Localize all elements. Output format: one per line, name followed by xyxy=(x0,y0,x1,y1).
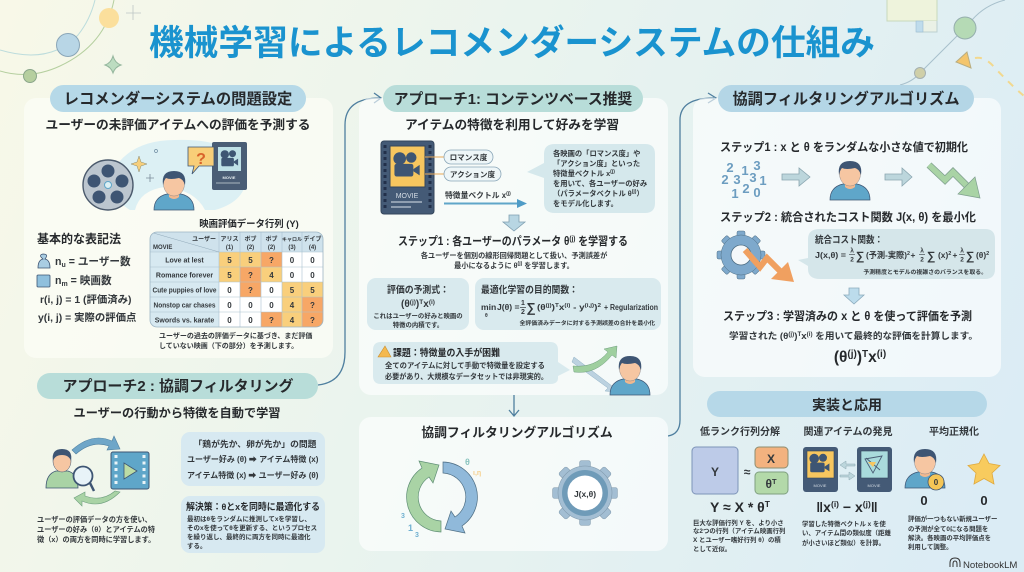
column: low rank factorization: θ xyxy=(765,477,772,491)
table: movie ratings: 4 xyxy=(290,316,295,325)
table: movie ratings: 0 xyxy=(227,286,232,295)
column: related items: い、アイテム間の類似度（距離 xyxy=(802,528,891,537)
formula: cost: 2 xyxy=(907,251,910,257)
title: 機械学習によるレコメンダーシステムの仕組み xyxy=(149,23,875,63)
notation list: n xyxy=(55,275,61,287)
icon: random numbers: 3 xyxy=(753,158,761,173)
icon: random numbers: 2 xyxy=(721,172,729,187)
step 3 description: T xyxy=(797,332,802,338)
icon: cycle arrows: θ xyxy=(465,457,470,467)
step 3 description: (j) xyxy=(788,332,794,338)
callout: feature explanation: (j) xyxy=(610,169,615,175)
notation list: r(i, j) = 1 (評価済み) xyxy=(40,293,132,306)
subheading: predict ratings: ユーザーの未評価アイテムへの評価を予測する xyxy=(46,117,310,132)
final formula: (i) xyxy=(877,349,886,360)
panel: algorithm steps xyxy=(693,85,1001,377)
formula: objective: - y xyxy=(570,302,585,312)
box: prediction formula: これはユーザーの好みと映画の xyxy=(373,311,463,320)
box: objective function xyxy=(475,278,661,330)
formula: cost: ∑ xyxy=(856,249,864,263)
formula: cost: + xyxy=(953,250,958,260)
icon: random numbers: 2 xyxy=(742,181,750,196)
column: mean normalization: 0 xyxy=(934,478,939,487)
caption: approach 2: ユーザーの好み（θ）とアイテムの特 xyxy=(37,525,155,534)
icon: cycle arrows: 3 xyxy=(401,513,405,520)
table caption xyxy=(159,331,312,350)
feature chips: ロマンス度 xyxy=(450,152,488,162)
icon: movie poster xyxy=(381,141,434,214)
caption: approach 2 xyxy=(37,515,155,544)
arrow: user to chart xyxy=(885,168,912,186)
callout: feature explanation: （パラメータベクトル θ xyxy=(553,189,632,198)
step 1 description xyxy=(421,251,608,270)
formula: objective: x xyxy=(559,302,565,312)
heading pill: problem setting xyxy=(50,85,306,112)
table: movie ratings: ? xyxy=(310,301,315,310)
formula: objective: 1 xyxy=(521,300,525,307)
panel: approach 1 xyxy=(359,85,668,395)
table: movie ratings: ? xyxy=(310,316,315,325)
icon: random numbers: 0 xyxy=(753,185,761,200)
formula: objective: (i,j) xyxy=(585,303,594,309)
heading pill: approach 1: アプローチ1: コンテンツベース推奨 xyxy=(394,90,632,108)
final formula: x xyxy=(868,349,877,366)
formula: objective xyxy=(481,300,658,319)
icon: gear with descending arrow xyxy=(717,231,794,282)
icon: cost gear: J(x,θ) xyxy=(574,489,596,499)
formula: cost: 2 xyxy=(948,251,951,257)
table: movie ratings: 4 xyxy=(269,271,274,280)
callout: feature explanation: ） xyxy=(636,189,644,198)
icon: warning xyxy=(378,346,391,357)
formula: objective: 2 xyxy=(521,309,525,316)
formula: objective: + Regularization xyxy=(604,302,658,312)
icon: cost gear xyxy=(553,461,617,525)
box: prediction formula: (i) xyxy=(429,299,435,306)
column: related items: − x xyxy=(839,499,863,515)
table: movie ratings: 5 xyxy=(248,256,253,265)
step 1 description: を学習します。 xyxy=(522,261,574,270)
table: movie ratings: 0 xyxy=(310,271,315,280)
formula: objective: 2 xyxy=(597,303,601,309)
formula: objective: T xyxy=(555,303,560,309)
formula: cost: (θ) xyxy=(976,250,986,260)
illustration: user and film loop xyxy=(46,436,149,506)
callout: cost function: 予測精度とモデルの複雑さのバランスを取る。 xyxy=(863,268,987,276)
illustration: reel, user and movie xyxy=(83,140,247,210)
callout: cost function: 統合コスト関数： xyxy=(815,234,883,245)
table: movie ratings: (4) xyxy=(309,245,316,251)
box: prediction formula: T xyxy=(419,299,423,306)
notation list: 基本的な表記法 xyxy=(37,231,121,246)
table: movie ratings: 5 xyxy=(227,256,232,265)
notation list: m xyxy=(61,281,68,288)
final formula: ) xyxy=(857,349,862,366)
table: movie ratings: Romance forever xyxy=(156,272,213,280)
arrow: down to step 3 xyxy=(844,288,864,304)
icon: cycle arrows xyxy=(401,457,481,539)
illustration: reel, user and movie: ? xyxy=(196,151,206,168)
notation list: = 映画数 xyxy=(68,274,112,287)
feature vector arrow: 特徴量ベクトル x xyxy=(445,191,506,200)
table: movie ratings: 0 xyxy=(269,301,274,310)
box: prediction formula: (j) xyxy=(410,299,416,306)
formula: cost: λ xyxy=(850,246,854,254)
box: chicken and egg: ユーザー好み (θ) ➡ アイテム特徴 (x) xyxy=(187,454,319,464)
box: solution: する。 xyxy=(187,542,206,550)
logo: NotebookLM xyxy=(950,558,1017,571)
box: prediction formula: 特徴の内積です。 xyxy=(393,320,443,329)
subheading: use item features: アイテムの特徴を利用して好みを学習 xyxy=(405,117,619,132)
formula: cost: 2 xyxy=(920,256,924,264)
icon: random numbers: 2 xyxy=(726,160,734,175)
heading pill: problem setting: レコメンダーシステムの問題設定 xyxy=(64,90,292,108)
column: mean normalization: 平均正規化 xyxy=(929,425,979,438)
formula: objective: ∑ xyxy=(526,300,536,315)
column: mean normalization: の予測が全て0になる問題を xyxy=(908,524,988,533)
panel: problem setting xyxy=(24,85,333,358)
callout: cost function xyxy=(798,229,995,279)
table: movie ratings: MOVIE xyxy=(153,245,172,251)
notation list: n xyxy=(55,256,61,268)
icon: random numbers: 1 xyxy=(731,186,739,201)
table: movie ratings: Cute puppies of love xyxy=(152,288,217,294)
formula: objective: (θ xyxy=(537,302,545,312)
column: related items: ‖ xyxy=(871,499,878,515)
box: prediction formula xyxy=(367,278,469,330)
table: movie ratings: 5 xyxy=(227,271,232,280)
box: objective function: 最適化学習の目的関数： xyxy=(481,283,578,296)
icon: user xyxy=(830,161,870,200)
logo: NotebookLM: NotebookLM xyxy=(963,560,1017,571)
column: related items: 関連アイテムの発見 xyxy=(804,425,892,438)
illustration: crossing arrows and user xyxy=(572,346,650,395)
heading pill: approach 1 xyxy=(383,85,643,112)
table: movie ratings: キャロル xyxy=(282,237,302,243)
table: movie ratings: Swords vs. karate xyxy=(155,318,214,324)
formula: cost: ∑ xyxy=(966,249,974,263)
formula: cost xyxy=(815,246,989,264)
final formula: (θ xyxy=(834,349,847,366)
callout: challenge xyxy=(373,342,570,384)
box: chicken and egg: アイテム特徴 (x) ➡ ユーザー好み (θ) xyxy=(187,470,319,480)
column: related items: MOVIE xyxy=(814,483,827,488)
feature vector arrow xyxy=(444,190,527,208)
table: movie ratings: 0 xyxy=(290,256,295,265)
heading pill: implementation xyxy=(707,391,987,417)
heading pill: algorithm: 協調フィルタリングアルゴリズム xyxy=(732,90,960,108)
step 3 description: (i) xyxy=(807,332,813,338)
icon: random numbers: 1 xyxy=(759,173,767,188)
table: movie ratings: 0 xyxy=(248,316,253,325)
table: movie ratings: 5 xyxy=(310,286,315,295)
column: mean normalization: 0 xyxy=(920,493,928,508)
feature chips: アクション度 xyxy=(450,169,495,179)
icon: random numbers: 1 xyxy=(741,163,749,178)
column: low rank factorization: Y xyxy=(711,465,719,479)
table: movie ratings: (3) xyxy=(288,245,296,251)
table: movie ratings: 0 xyxy=(290,271,295,280)
table: movie ratings: ? xyxy=(269,316,274,325)
formula: cost: + xyxy=(911,250,916,260)
caption: approach 2: 徴（x）の両方を同時に学習します。 xyxy=(37,535,155,544)
icon: random numbers: 3 xyxy=(749,170,757,185)
step 1 heading: を学習する xyxy=(575,234,628,248)
callout: feature explanation: (j) xyxy=(632,189,637,195)
panel: approach 2 xyxy=(37,373,325,553)
notation list: u xyxy=(61,262,66,269)
table: movie ratings: (2) xyxy=(247,245,254,251)
table: movie ratings: 0 xyxy=(227,316,232,325)
final formula: T xyxy=(862,349,868,360)
table: movie ratings: (2) xyxy=(268,245,275,251)
table title: 映画評価データ行列 (Y) xyxy=(199,218,299,229)
table: movie ratings: ? xyxy=(269,256,274,265)
icon: movie poster: MOVIE xyxy=(396,193,419,200)
formula: cost: 2 xyxy=(960,256,964,264)
table: movie ratings: 0 xyxy=(248,301,253,310)
column: low rank factorization: T xyxy=(772,477,777,486)
box: chicken and egg xyxy=(181,432,325,486)
formula: objective: θ xyxy=(485,313,488,319)
decoration: top left orbits xyxy=(0,0,141,82)
icon: cycle arrows: 3 xyxy=(415,532,419,539)
step 2 heading: ステップ2 : 統合されたコスト関数 J(x, θ) を最小化 xyxy=(720,210,976,224)
icon: random numbers: 3 xyxy=(733,172,741,187)
callout: feature explanation: を用いて、各ユーザーの好み xyxy=(553,179,647,188)
feature vector arrow: (j) xyxy=(506,191,511,197)
column: low rank factorization: 低ランク行列分解 xyxy=(700,425,780,438)
heading pill: approach 2 xyxy=(37,373,318,399)
column: mean normalization xyxy=(905,425,1000,551)
heading pill: approach 2: アプローチ2 : 協調フィルタリング xyxy=(62,377,294,395)
callout: feature explanation: をモデル化します。 xyxy=(553,199,618,208)
formula: cost: λ xyxy=(920,246,924,254)
table: movie ratings: 0 xyxy=(269,286,274,295)
panel: collaborative filtering algorithm summary xyxy=(359,417,668,551)
box: prediction formula: x xyxy=(423,299,429,310)
column: low rank factorization: ≈ xyxy=(744,465,751,479)
table: movie ratings: ユーザー xyxy=(192,235,216,243)
table: movie ratings: Nonstop car chases xyxy=(154,302,216,310)
heading pill: implementation: 実装と応用 xyxy=(812,397,882,413)
box: solution: 解決策：θとxを同時に最適化する xyxy=(186,501,320,512)
arrow: down to step 1 xyxy=(503,215,525,231)
final formula: (j) xyxy=(847,349,857,360)
step 3 description: を用いて最終的な評価を計算します。 xyxy=(813,330,978,341)
table: movie ratings xyxy=(150,232,323,327)
box: prediction formula: ) xyxy=(416,299,419,310)
flow arrow: approach 2 to approach 1 xyxy=(318,93,381,385)
notation list xyxy=(37,231,137,324)
box: chicken and egg: 「鶏が先か、卵が先か」の問題 xyxy=(194,438,317,449)
callout: feature explanation: 各映画の「ロマンス度」や xyxy=(553,149,640,158)
column: mean normalization: 利用して調整。 xyxy=(908,542,953,551)
caption: approach 2: ユーザーの評価データの方を使い、 xyxy=(37,515,152,524)
icon: user xyxy=(38,254,50,268)
notation list: y(i, j) = 実際の評価点 xyxy=(38,311,137,324)
icon: random numbers xyxy=(721,158,767,201)
table: movie ratings: ? xyxy=(248,271,253,280)
flow arrow: to collaborative filtering algorithm xyxy=(668,93,716,436)
formula: cost: λ xyxy=(960,246,964,254)
column: related items: (i) xyxy=(831,499,839,509)
formula: cost: 2 xyxy=(986,251,989,257)
callout: feature explanation: 特徴量ベクトル x xyxy=(553,169,610,178)
formula: cost: (予測-実際) xyxy=(866,250,908,260)
column: low rank factorization xyxy=(692,425,788,553)
step 3 description: ) xyxy=(794,331,797,341)
table: movie ratings: ボブ xyxy=(244,235,257,243)
feature chips xyxy=(425,150,501,181)
column: related items xyxy=(802,425,892,547)
step 1 heading: (j) xyxy=(569,234,576,243)
subheading: learn from behavior: ユーザーの行動から特徴を自動で学習 xyxy=(74,405,280,420)
column: mean normalization: 解決。各映画の平均評価点を xyxy=(908,533,991,542)
formula: cost: (x) xyxy=(938,250,948,260)
heading pill: algorithm xyxy=(718,85,974,112)
callout: feature explanation: 「アクション度」といった xyxy=(553,159,640,168)
table: movie ratings: デイブ xyxy=(303,235,322,243)
column: related items: 学習した特徴ベクトル x を使 xyxy=(802,519,886,528)
notation list: = ユーザー数 xyxy=(66,255,131,268)
column: low rank factorization: として近似。 xyxy=(693,544,731,553)
decoration: top right shapes xyxy=(887,0,1024,96)
column: low rank factorization: X とユーザー嗜好行列 θ）の積 xyxy=(693,535,781,544)
step 3 heading: ステップ3 : 学習済みの x と θ を使って評価を予測 xyxy=(723,309,972,323)
formula: objective: (j) xyxy=(546,303,552,309)
table: movie ratings: 5 xyxy=(290,286,295,295)
table caption: ユーザーの過去の評価データに基づき、まだ評価 xyxy=(159,331,312,340)
formula: objective: J(θ) = xyxy=(497,302,520,312)
table caption: していない映画（下の部分）を予測します。 xyxy=(159,341,298,350)
box: objective function: 全評価済みデータに対する予測誤差の合計を最小化 xyxy=(520,319,655,327)
flow arrow: between middle panels xyxy=(509,395,519,416)
step 3 description: x xyxy=(801,331,808,341)
icon: cycle arrows: ι,η xyxy=(473,470,481,477)
section: implementation and applications xyxy=(692,391,1000,553)
arrow: numbers to user xyxy=(782,168,810,186)
formula: objective: min xyxy=(481,302,496,312)
table: movie ratings: 0 xyxy=(227,301,232,310)
column: related items: が小さいほど類似）を計算。 xyxy=(802,538,885,547)
formula: objective: ) xyxy=(594,302,598,312)
column: low rank factorization: Y ≈ X * θ xyxy=(710,499,765,515)
box: solution: そのxを使ってθを更新する、というプロセス xyxy=(187,523,317,532)
step 1 heading: ステップ1 : 各ユーザーのパラメータ θ xyxy=(398,236,596,248)
icon: descending arrow xyxy=(929,165,980,198)
step 1 heading: ステップ1 : x と θ をランダムな小さな値で初期化 xyxy=(720,140,968,154)
column: mean normalization: 評価が一つもない新規ユーザー xyxy=(908,514,997,523)
column: low rank factorization: X xyxy=(767,452,775,466)
column: related items: MOVIE xyxy=(868,483,881,488)
column: low rank factorization: な2つの行列（アイテム映画行列 xyxy=(693,526,785,535)
table: movie ratings: 4 xyxy=(290,301,295,310)
icon: film xyxy=(37,275,50,287)
table: movie ratings: ボブ xyxy=(265,235,278,243)
box: prediction formula: 評価の予測式： xyxy=(387,283,449,296)
formula: objective: ) xyxy=(552,302,555,312)
callout: feature explanation xyxy=(527,144,655,213)
box: solution: 最初はθをランダムに推測してxを学習し、 xyxy=(187,514,311,523)
callout: challenge: 必要があり、大規模なデータセットでは非現実的。 xyxy=(385,371,548,381)
table: movie ratings: (1) xyxy=(226,245,233,251)
table: movie ratings: アリス xyxy=(220,236,239,243)
step 1 description: (j) xyxy=(518,261,523,267)
callout: challenge: 全てのアイテムに対して手動で特徴量を設定する xyxy=(385,360,545,370)
heading: 協調フィルタリングアルゴリズム xyxy=(421,425,613,440)
formula: objective: (i) xyxy=(564,303,571,309)
column: low rank factorization: T xyxy=(765,499,771,509)
table: movie ratings: ? xyxy=(248,286,253,295)
step 1 description: 各ユーザーを個別の線形回帰問題として扱い、予測誤差が xyxy=(421,251,608,260)
box: solution: を繰り返し、最終的に両方を同時に最適化 xyxy=(187,532,311,541)
step 1 description: 最小になるように θ xyxy=(454,261,518,270)
formula: cost: 2 xyxy=(850,256,854,264)
table: movie ratings: 0 xyxy=(310,256,315,265)
table: movie ratings: Love at lest xyxy=(165,258,204,264)
column: mean normalization: 0 xyxy=(980,493,988,508)
icon: cycle arrows: 1 xyxy=(408,523,413,533)
callout: challenge: 課題：特徴量の入手が困難 xyxy=(393,346,500,359)
box: solution xyxy=(181,496,325,553)
box: prediction formula: (θ xyxy=(401,299,410,310)
formula: cost: ∑ xyxy=(927,249,935,263)
formula: cost: J(x,θ) = xyxy=(815,250,846,260)
column: related items: (j) xyxy=(863,499,871,509)
column: low rank factorization: 巨大な評価行列 Y を、より小さ xyxy=(693,518,784,527)
step 3 description: 学習された (θ xyxy=(729,331,786,341)
column: related items: ‖x xyxy=(816,499,831,515)
illustration: reel, user and movie: MOVIE xyxy=(223,175,236,180)
